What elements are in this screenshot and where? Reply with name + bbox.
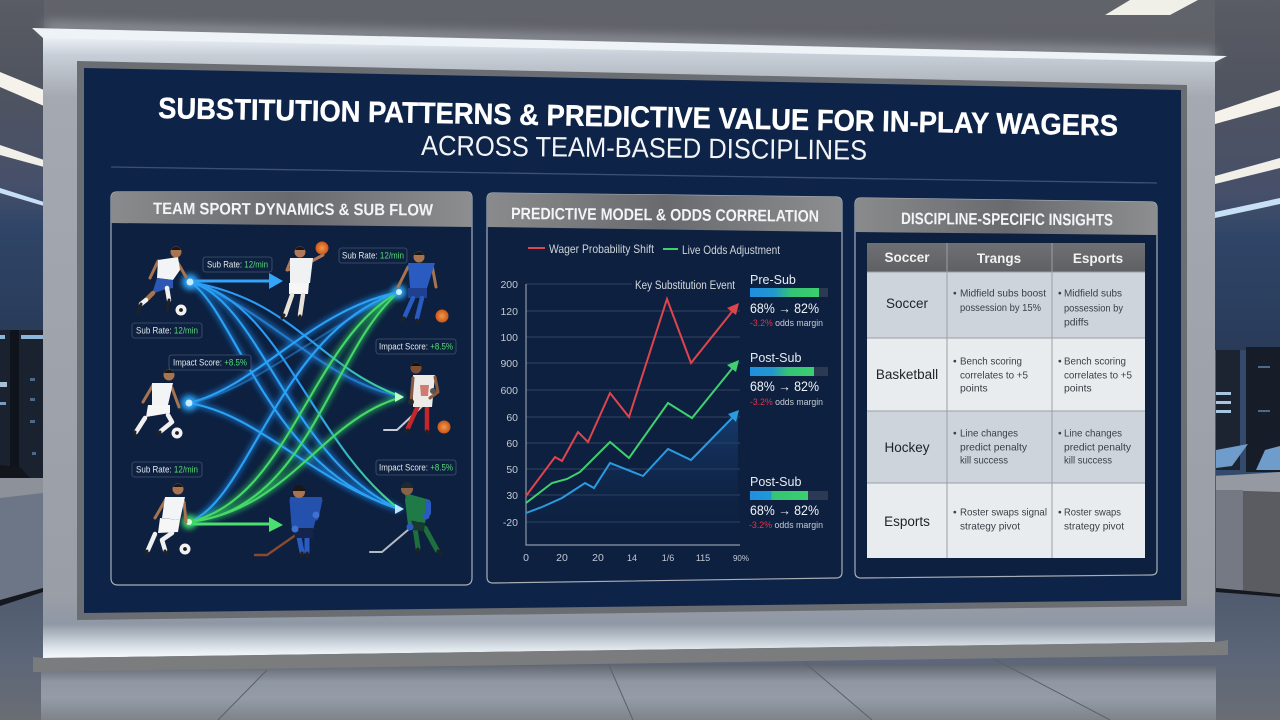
label: sub rate left: Sub Rate: 12/min xyxy=(136,326,198,336)
table header row: Esports xyxy=(1073,251,1123,266)
red series xyxy=(526,299,739,496)
table header row: Soccer xyxy=(884,250,930,265)
table row: esports: strategy pivot xyxy=(960,522,1020,532)
y axis labels xyxy=(500,279,518,529)
chart legend: Live Odds Adjustment xyxy=(682,243,781,257)
table row: hockey: • xyxy=(953,428,957,440)
x axis labels: 0 xyxy=(523,552,529,564)
table row: hockey xyxy=(867,411,1145,483)
table row: hockey: Line changes xyxy=(960,428,1018,440)
table row: basketball: • xyxy=(953,356,957,368)
table row: soccer: pdiffs xyxy=(1064,318,1089,328)
left ceiling light strips xyxy=(0,72,44,206)
label: impact score right: Impact Score: +8.5% xyxy=(379,342,453,352)
ceiling light panel xyxy=(1105,0,1198,15)
title xyxy=(158,92,1118,166)
y axis labels: 60 xyxy=(506,412,518,424)
y axis labels: 30 xyxy=(506,490,518,502)
stat: pre-sub xyxy=(750,273,828,329)
panel heading: TEAM SPORT DYNAMICS & SUB FLOW xyxy=(153,200,433,219)
stat: pre-sub: -3.2% odds margin xyxy=(750,318,823,329)
player: hockey bottom centre xyxy=(255,485,322,556)
table row: hockey: predict penalty xyxy=(960,442,1028,454)
stat: pre-sub: 68% → 82% xyxy=(750,301,819,316)
table row: basketball: points xyxy=(960,384,988,394)
stat: post-sub upper: 68% → 82% xyxy=(750,379,819,394)
y axis labels: 50 xyxy=(506,464,518,476)
stat: post-sub lower xyxy=(749,475,828,531)
x axis labels xyxy=(523,552,749,564)
table row: basketball: Bench scoring xyxy=(960,356,1022,368)
x axis labels: 90% xyxy=(733,554,749,563)
table row: soccer: possession by 15% xyxy=(960,303,1041,314)
player: hockey middle right xyxy=(384,362,450,434)
y axis labels: -20 xyxy=(503,517,518,529)
table row: hockey: Line changes xyxy=(1064,428,1122,440)
panel heading: PREDICTIVE MODEL & ODDS CORRELATION xyxy=(511,205,819,226)
table row: hockey: predict penalty xyxy=(1064,442,1132,454)
player: soccer middle left xyxy=(134,370,182,438)
table row: basketball: Bench scoring xyxy=(1064,356,1126,368)
table row: basketball: correlates to +5 xyxy=(1064,370,1132,382)
table row: hockey: • xyxy=(1058,428,1062,440)
panel header xyxy=(855,198,1157,235)
stat: post-sub upper: Post-Sub xyxy=(750,351,801,365)
label: sub rate top right xyxy=(339,248,407,263)
label: sub rate bottom left: Sub Rate: 12/min xyxy=(136,464,198,474)
table row: soccer: Midfield subs boost xyxy=(960,288,1046,300)
table row: esports: strategy pivot xyxy=(1064,522,1124,532)
player: soccer bottom left xyxy=(146,484,190,554)
table row: basketball: points xyxy=(1064,384,1092,394)
table row: esports: Roster swaps signal xyxy=(960,508,1047,518)
table row: esports: • xyxy=(1058,508,1062,518)
screen xyxy=(84,68,1181,613)
x axis labels: 20 xyxy=(592,552,604,564)
left server racks and counter xyxy=(0,330,43,606)
y axis labels: 200 xyxy=(500,279,518,291)
table row: basketball: correlates to +5 xyxy=(960,370,1028,382)
label: impact score bottom right: Impact Score: +8.5% xyxy=(379,462,453,472)
screen bezel xyxy=(77,61,1187,620)
label: sub rate top centre: Sub Rate: 12/min xyxy=(207,260,268,270)
flow lines xyxy=(189,282,402,522)
x axis labels: 20 xyxy=(556,552,568,564)
table row: soccer: Midfield subs xyxy=(1064,288,1122,300)
table row: basketball: • xyxy=(1058,356,1062,368)
insights table xyxy=(867,243,1145,558)
panel: predictive model and odds correlation xyxy=(487,193,842,583)
table row: hockey: kill success xyxy=(960,456,1008,466)
flow nodes xyxy=(181,274,406,529)
green series xyxy=(526,360,739,503)
table row: soccer: • xyxy=(953,288,957,300)
blue series xyxy=(526,410,739,513)
x axis labels: 115 xyxy=(696,553,710,563)
label: sub rate top centre xyxy=(203,257,272,272)
y axis labels: 60 xyxy=(506,438,518,450)
table row: soccer: • xyxy=(1058,288,1062,300)
stat: post-sub upper xyxy=(750,351,828,408)
chart axes xyxy=(526,284,740,545)
table row: esports: Esports xyxy=(884,514,930,529)
panel header xyxy=(487,193,842,232)
panel header xyxy=(111,192,472,227)
player: hockey bottom right xyxy=(370,482,441,553)
wall top light edge xyxy=(32,28,1227,62)
y axis labels: 100 xyxy=(500,332,518,344)
table row: esports: Roster swaps xyxy=(1064,508,1121,518)
chart legend xyxy=(528,242,781,257)
x axis labels: 1/6 xyxy=(662,553,674,563)
arrow: top blue xyxy=(190,273,283,289)
player: basketball top centre xyxy=(282,242,328,319)
label: impact score left xyxy=(169,355,251,370)
y axis labels: 600 xyxy=(500,385,518,397)
label: sub rate top right: Sub Rate: 12/min xyxy=(342,250,404,260)
label: impact score bottom right xyxy=(376,460,456,475)
table row: basketball: Basketball xyxy=(876,367,938,382)
subtitle: ACROSS TEAM-BASED DISCIPLINES xyxy=(421,130,867,166)
label: sub rate left xyxy=(132,323,202,338)
right ceiling light strips xyxy=(1215,90,1280,218)
stat: post-sub lower: 68% → 82% xyxy=(750,503,819,518)
line chart xyxy=(500,279,749,564)
table row: soccer: Soccer xyxy=(886,296,929,311)
table row: soccer: possession by xyxy=(1064,304,1124,314)
floor xyxy=(0,590,1280,720)
label: impact score left: Impact Score: +8.5% xyxy=(173,358,247,368)
label: sub rate bottom left xyxy=(132,462,202,477)
panel heading: DISCIPLINE-SPECIFIC INSIGHTS xyxy=(901,210,1113,229)
title: SUBSTITUTION PATTERNS & PREDICTIVE VALUE FOR IN-PLAY WAGERS xyxy=(158,92,1118,143)
player: blue top right xyxy=(398,252,448,322)
flow network xyxy=(189,282,402,522)
table row: hockey: Hockey xyxy=(884,440,930,455)
panel: discipline-specific insights xyxy=(855,198,1157,578)
table header row xyxy=(867,243,1145,272)
player: soccer top left xyxy=(138,246,186,316)
wall base strip xyxy=(33,640,1228,672)
table row: hockey: kill success xyxy=(1064,456,1112,466)
table row: soccer xyxy=(867,272,1145,338)
stat: post-sub lower: -3.2% odds margin xyxy=(749,520,823,531)
flow glow layer xyxy=(189,282,402,522)
y axis labels: 900 xyxy=(500,358,518,370)
label: impact score right xyxy=(376,339,456,354)
stat: pre-sub: Pre-Sub xyxy=(750,273,796,287)
arrow: bottom green xyxy=(190,517,283,532)
chart gridlines xyxy=(526,284,740,522)
chart annotation: Key Substitution Event xyxy=(635,280,736,292)
right server racks and counter xyxy=(1216,347,1280,597)
stat: post-sub upper: -3.2% odds margin xyxy=(750,397,823,408)
y axis labels: 120 xyxy=(500,306,518,318)
x axis labels: 14 xyxy=(627,553,637,563)
blue area xyxy=(526,412,738,545)
table row: basketball xyxy=(867,338,1145,411)
table row: esports: • xyxy=(953,508,957,518)
panel: team sport dynamics and sub flow xyxy=(111,192,472,585)
table row: esports xyxy=(867,483,1145,558)
chart legend: Wager Probability Shift xyxy=(549,242,655,256)
stat: post-sub lower: Post-Sub xyxy=(750,475,801,489)
table header row: Trangs xyxy=(977,251,1021,266)
